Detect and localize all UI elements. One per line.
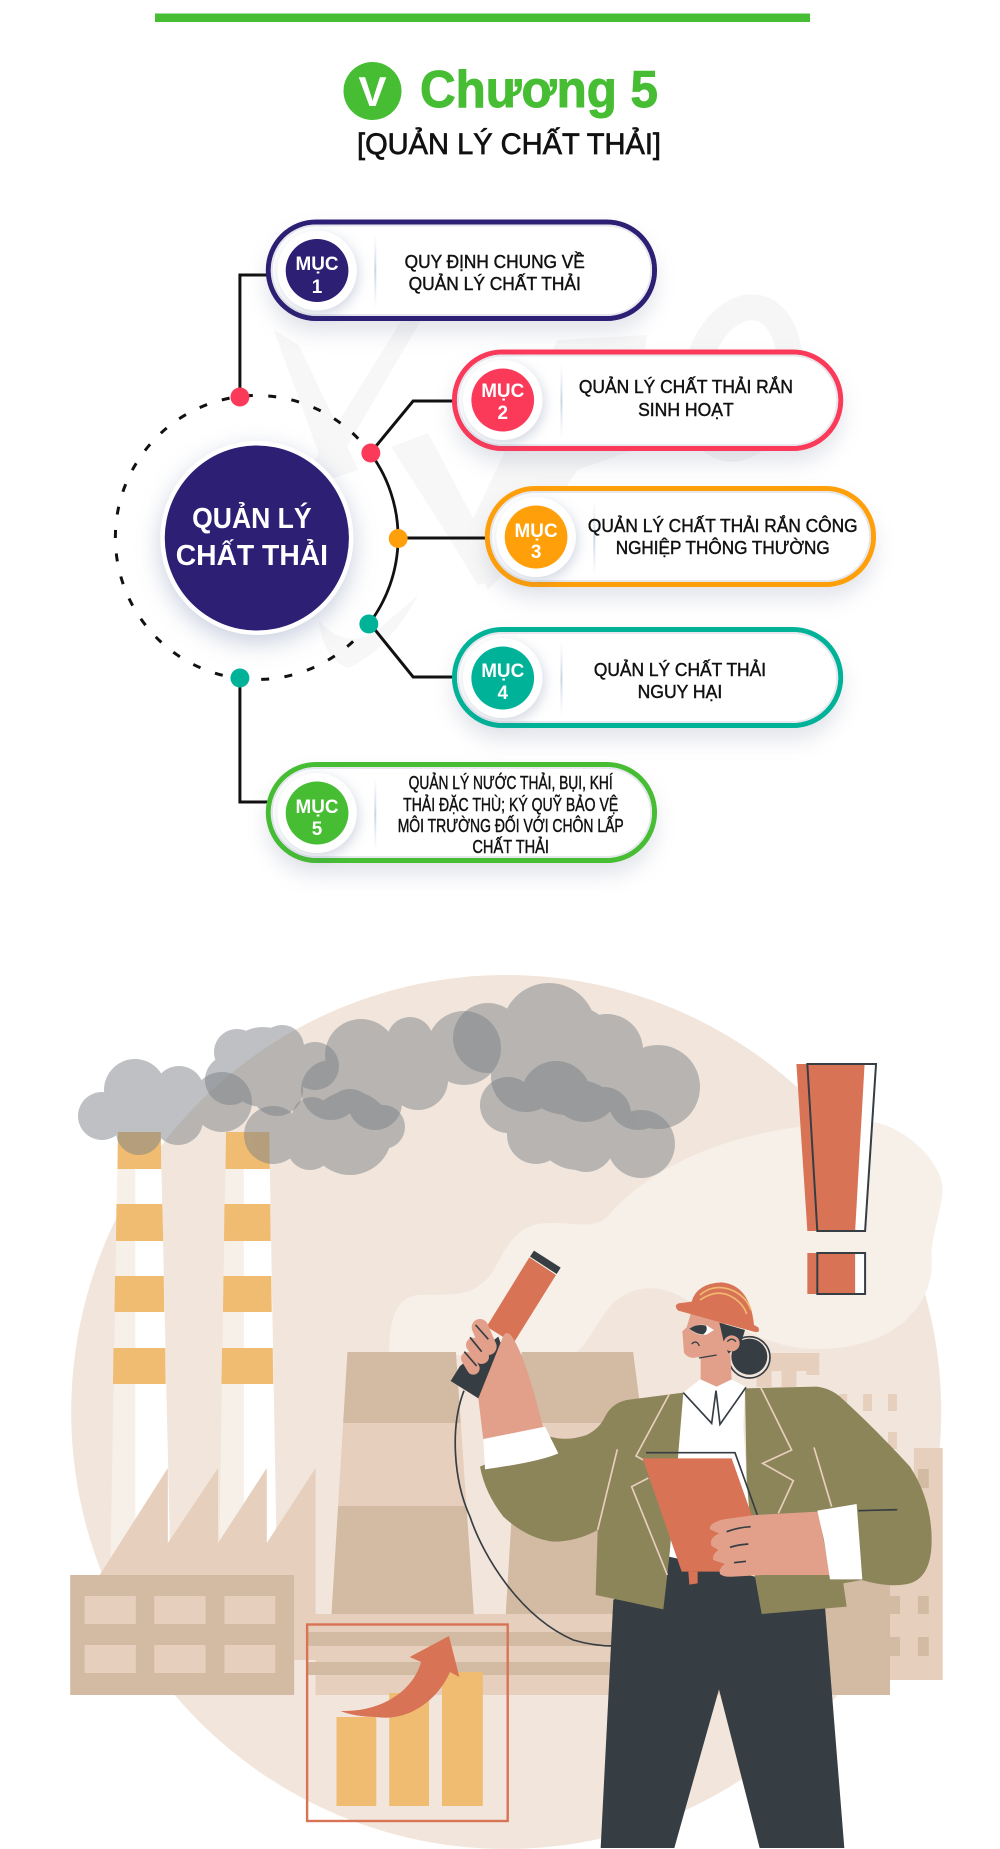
central hub: Quản lý chất thải: QUẢN LÝ (192, 501, 312, 535)
hair bun (729, 1337, 770, 1378)
panel: muc 2 (454, 352, 841, 448)
subtitle: [QUẢN LÝ CHẤT THẢI] (357, 127, 661, 161)
panel: muc 4: NGUY HẠI (638, 681, 722, 702)
trousers (601, 1557, 844, 1848)
raised hand and forearm (464, 1325, 543, 1440)
worker figure (451, 1251, 932, 1848)
diagram: waste management hub (115, 222, 874, 860)
central hub: Quản lý chất thải (160, 441, 353, 635)
panel: muc 3: MỤC (515, 521, 558, 542)
top green bar (155, 14, 810, 22)
illustration: factory scene (70, 975, 943, 1849)
exclamation mark (796, 1064, 876, 1294)
watermark logo (274, 297, 803, 668)
clipboard (643, 1453, 757, 1585)
hair (719, 1323, 745, 1353)
neck and face (682, 1314, 732, 1387)
sawtooth factory roof (99, 1468, 316, 1660)
cooling towers (332, 1352, 640, 1614)
panel: muc 2: MỤC (481, 381, 525, 402)
panel: muc 3: NGHIỆP THÔNG THƯỜNG (616, 537, 830, 558)
solid orbit arc (369, 453, 398, 624)
badge: chapter numeral V (344, 62, 402, 120)
panel: muc 5: MỤC (296, 797, 339, 818)
heading: Chương 5: Chương 5 (420, 61, 658, 119)
right sleeve line (858, 1510, 897, 1511)
panel: muc 2: QUẢN LÝ CHẤT THẢI RẮN (579, 376, 793, 397)
factory building with windows (70, 1575, 294, 1695)
background circle (71, 975, 941, 1849)
light haze blob (389, 1122, 943, 1355)
panel: muc 5: THẢI ĐẶC THÙ; KÝ QUỸ BẢO VỆ (403, 794, 618, 815)
smoke clouds (78, 983, 700, 1178)
dashed orbit (115, 396, 370, 680)
panel: muc 2: SINH HOẠT (638, 399, 734, 420)
shirt (669, 1379, 755, 1577)
panel: muc 1: QUẢN LÝ CHẤT THẢI (409, 273, 581, 294)
panel: muc 3: QUẢN LÝ CHẤT THẢI RẮN CÔNG (588, 515, 858, 536)
panel: muc 3 (487, 488, 874, 584)
factory base band (307, 1570, 890, 1695)
panel: muc 4: 4 (497, 683, 508, 704)
panel: muc 5: MÔI TRƯỜNG ĐỐI VỚI CHÔN LẤP (398, 815, 624, 836)
hard hat (676, 1282, 759, 1332)
panel: muc 5 (268, 764, 655, 860)
microphone cable (455, 1391, 614, 1646)
holding hand (710, 1512, 830, 1577)
shirt collar (683, 1387, 746, 1424)
right cuff (817, 1504, 862, 1579)
facial features (689, 1325, 736, 1358)
chart: growth bars with arrow (307, 1624, 508, 1821)
panel: muc 5: QUẢN LÝ NƯỚC THẢI, BỤI, KHÍ (409, 772, 613, 793)
panel: muc 1: QUY ĐỊNH CHUNG VỀ (405, 251, 585, 272)
back buildings right (757, 1353, 943, 1680)
panel: muc 3: 3 (531, 542, 541, 563)
connector lines (240, 275, 487, 802)
jacket (480, 1393, 683, 1609)
chimneys (111, 1132, 277, 1560)
badge: chapter numeral V: V (358, 68, 387, 115)
panel: muc 5: CHẤT THẢI (472, 836, 549, 857)
panel: muc 1: 1 (312, 277, 322, 298)
panel: muc 4: QUẢN LÝ CHẤT THẢI (594, 659, 766, 680)
ear (724, 1335, 740, 1351)
panel: muc 1: MỤC (296, 254, 339, 275)
central hub: Quản lý chất thải: CHẤT THẢI (176, 538, 328, 572)
panel: muc 5: 5 (312, 819, 322, 840)
left cuff (483, 1427, 558, 1469)
panel: muc 4: MỤC (481, 661, 525, 682)
lapel lines (598, 1387, 832, 1575)
title block (344, 61, 661, 161)
panel: muc 4 (454, 630, 841, 726)
panel: muc 1 (268, 222, 655, 318)
orbit dots (230, 388, 408, 688)
panel: muc 2: 2 (497, 403, 508, 424)
flashlight (451, 1251, 561, 1398)
